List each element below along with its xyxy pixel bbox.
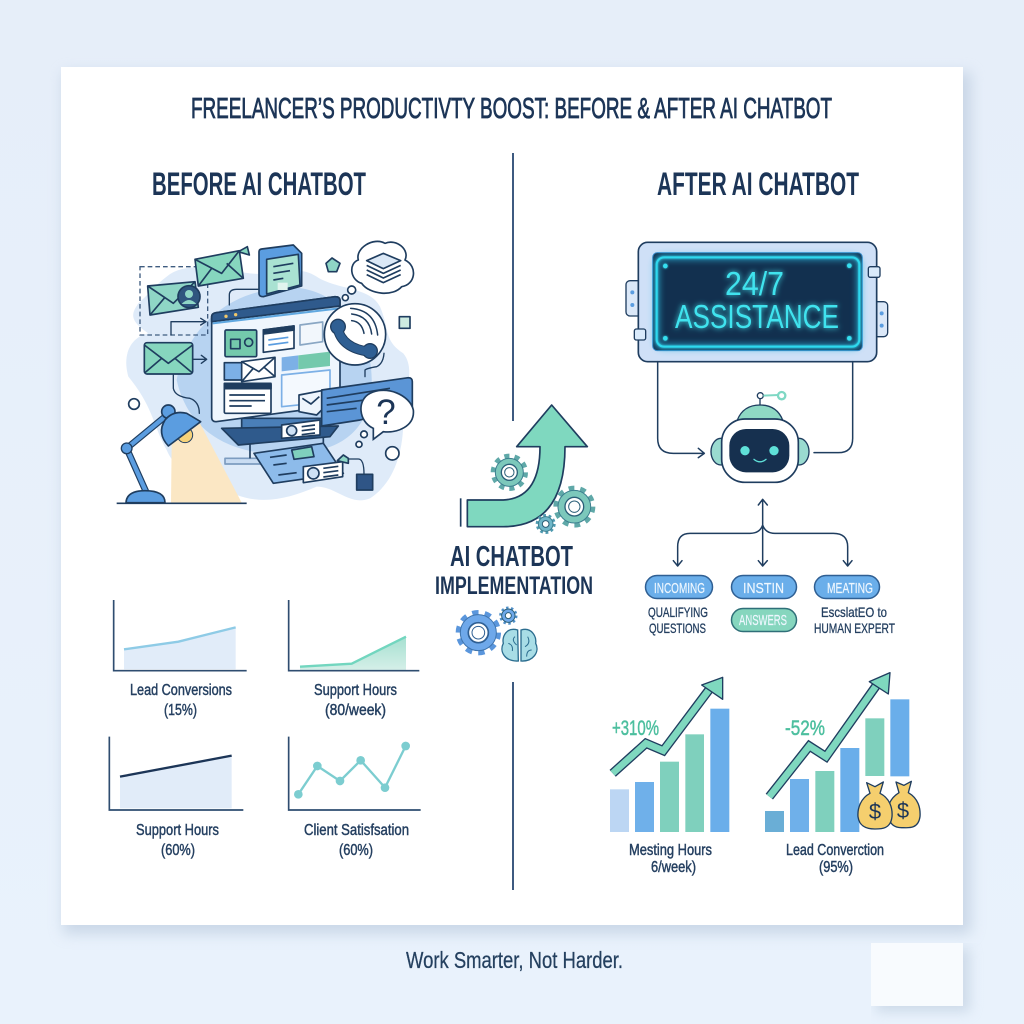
footer tagline: Work Smarter, Not Harder.: [406, 947, 623, 973]
envelope: with avatar: [148, 282, 200, 315]
chart: lead conversion growth: Lead Converction: [786, 842, 884, 859]
label: AI chatbot: AI CHATBOT: [450, 541, 573, 573]
envelope: top: [195, 247, 249, 286]
pill: instant: INSTIN: [743, 580, 784, 597]
decorative card: small square bottom right: [871, 943, 970, 1012]
connectors: robot to outcomes: [673, 499, 852, 566]
panel: main white card: [61, 67, 971, 934]
illustration: overwhelmed workspace: [117, 241, 413, 503]
small star and note: [326, 258, 410, 328]
monitor: [212, 297, 340, 428]
chart: lead conversion growth: $: [869, 799, 881, 824]
caption: escalated to human expert: EscslatEO to: [821, 604, 887, 620]
chart: meeting hours growth: +310%: [612, 717, 659, 740]
chart: client satisfaction: Client Satisfsation: [304, 822, 409, 839]
connectors: sign to robot: [658, 362, 853, 458]
chart: support hours percent: [109, 737, 243, 859]
thought cloud with stack: [342, 241, 413, 301]
caption: qualifying questions: QUALIFYING: [648, 604, 708, 620]
chart: support hours per week: (80/week): [325, 702, 386, 719]
caption: qualifying questions: QUESTIONS: [649, 620, 706, 636]
pill: instant: [732, 576, 796, 598]
pill: incoming: [646, 576, 712, 598]
dashed selection: [140, 267, 208, 335]
heading: after: AFTER AI CHATBOT: [657, 166, 859, 202]
chart: support hours per week: [289, 600, 419, 719]
chart: lead conversions: [114, 600, 247, 719]
contact cards: [254, 420, 348, 483]
pill: answers: [732, 608, 796, 632]
chart: meeting hours growth: [610, 677, 729, 876]
pill: incoming: INCOMING: [654, 580, 705, 597]
chart: lead conversion growth: $: [897, 798, 909, 823]
chart: lead conversion growth: -52%: [785, 717, 825, 740]
question bubble: ?: [376, 393, 396, 432]
pill: answers: ANSWERS: [739, 612, 787, 629]
chart: support hours percent: Support Hours: [136, 822, 219, 839]
chart: lead conversions: (15%): [164, 702, 197, 719]
chart: client satisfaction: (60%): [339, 842, 373, 859]
gears: blue: [458, 608, 516, 653]
panel: 24/7 assistance sign: 24/7: [725, 265, 784, 302]
chart: support hours per week: Support Hours: [314, 682, 397, 699]
keyboard and stand: [222, 426, 338, 464]
chart: meeting hours growth: Mesting Hours: [629, 842, 712, 859]
question bubble: [361, 390, 413, 439]
heading: before: BEFORE AI CHATBOT: [152, 166, 366, 202]
folder with document: [259, 245, 302, 297]
transition: AI chatbot implementation: [435, 405, 593, 661]
icon: robot: [711, 392, 809, 482]
light cone: [171, 423, 242, 503]
center divider: [512, 153, 514, 890]
chart: lead conversions: Lead Conversions: [130, 682, 232, 699]
chart: lead conversion growth: (95%): [819, 859, 853, 876]
caption: qualifying questions: [648, 604, 708, 636]
gears: teal: [493, 456, 593, 532]
pill: meeting: [814, 576, 880, 598]
phone badge: [324, 304, 386, 365]
chart: client satisfaction: [289, 737, 421, 859]
brain icon: [502, 629, 537, 661]
envelope: green front: [144, 343, 193, 374]
chart: support hours percent: (60%): [161, 842, 195, 859]
chart: meeting hours growth: 6/week): [651, 859, 696, 876]
caption: escalated to human expert: [814, 604, 895, 636]
background blobs: [126, 267, 409, 500]
desk lamp: [117, 405, 247, 503]
pill: meeting: MEATING: [827, 580, 873, 597]
money bags: [858, 781, 920, 829]
panel: 24/7 assistance sign: ASSISTANCE: [675, 298, 839, 335]
right blue window: [299, 378, 412, 426]
curved arrow: [461, 405, 587, 527]
label: implementation: IMPLEMENTATION: [435, 572, 593, 600]
caption: escalated to human expert: HUMAN EXPERT: [814, 620, 895, 636]
panel: 24/7 assistance sign: [626, 242, 888, 362]
connectors: [171, 289, 384, 474]
chart: lead conversion growth: [765, 673, 920, 876]
small shapes: [129, 399, 399, 490]
